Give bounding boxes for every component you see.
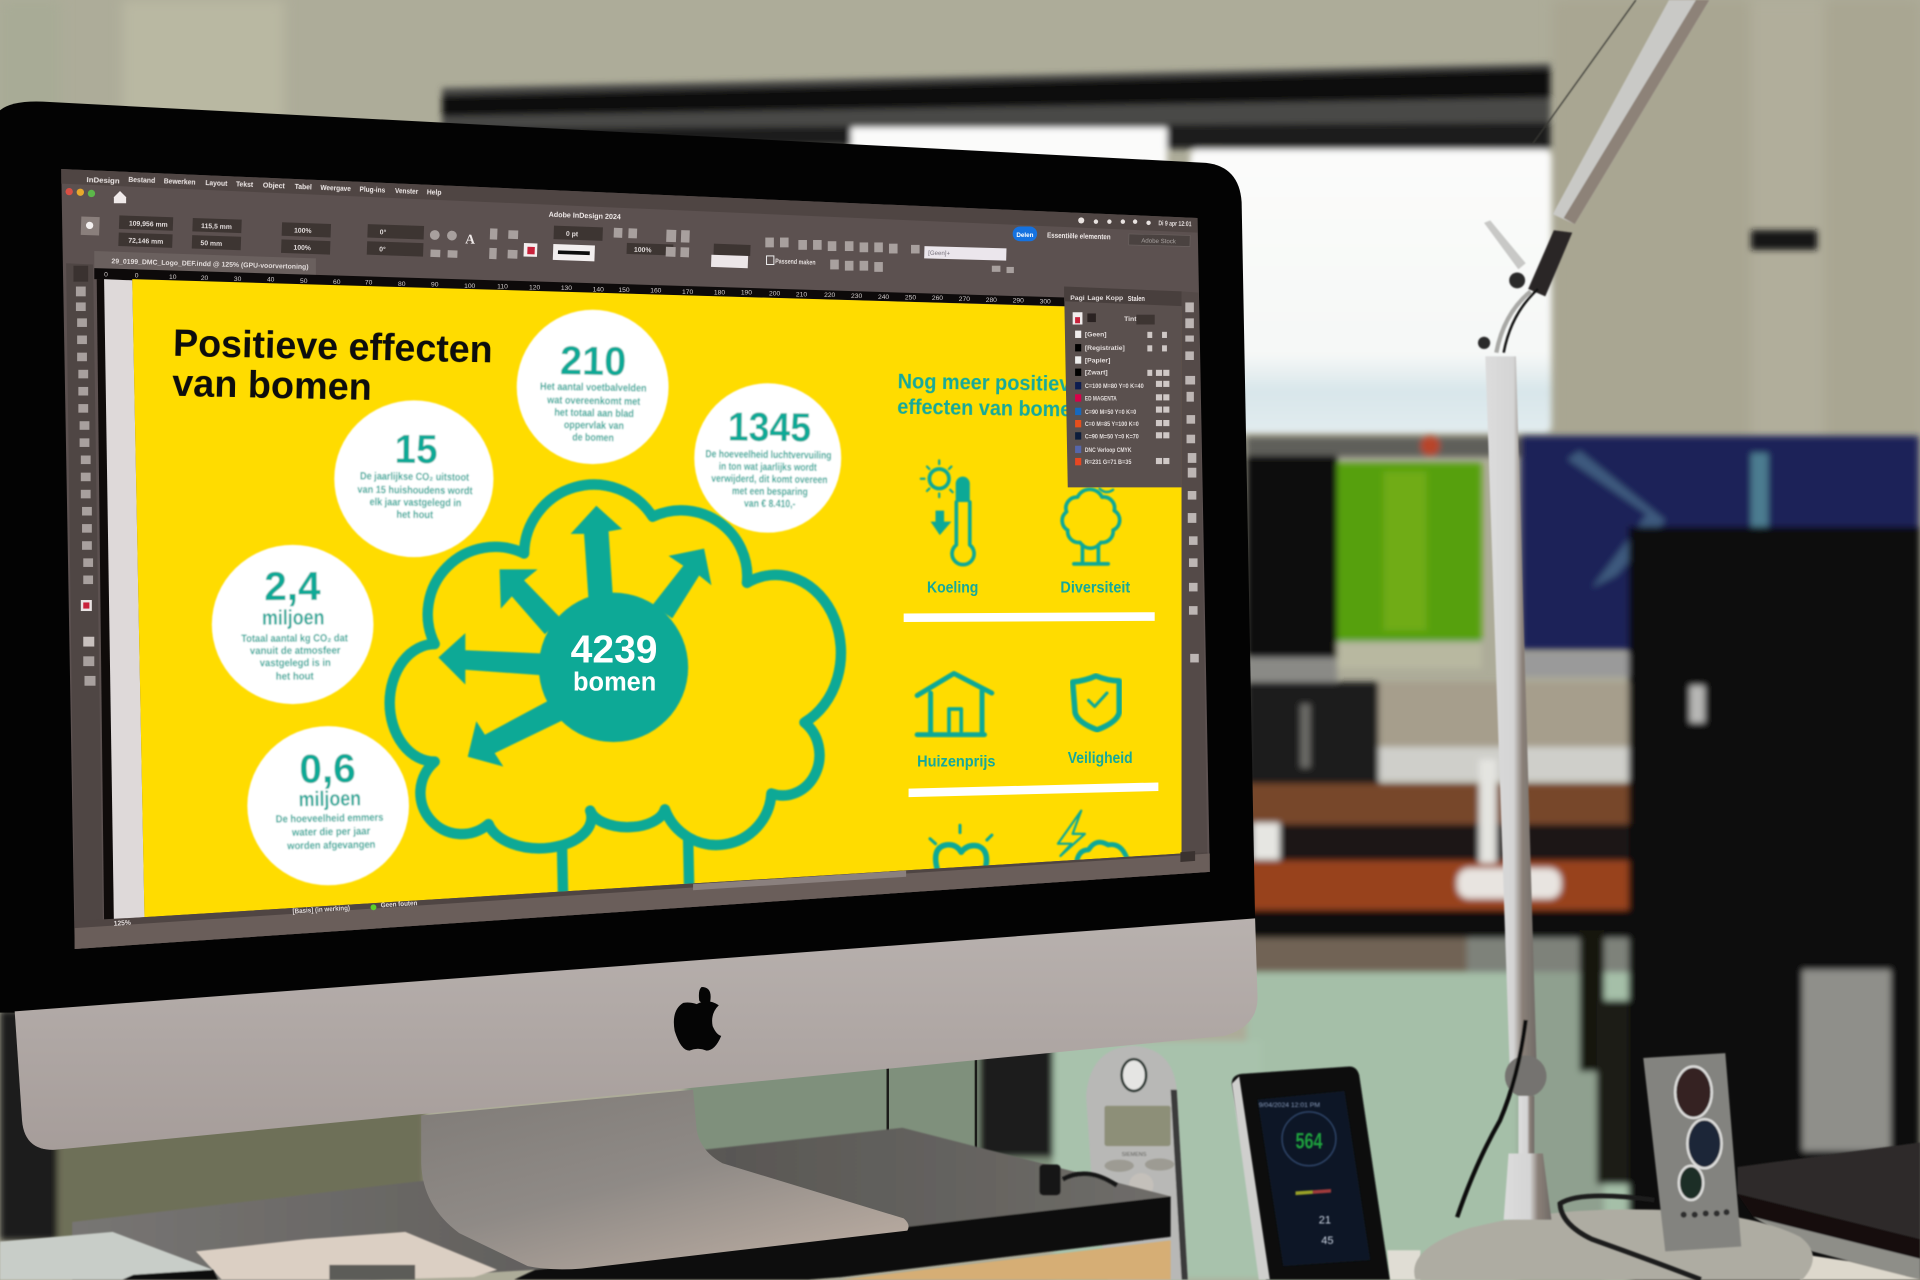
stat: 210 football fields: 210 <box>560 337 627 384</box>
control panel: 0 pt <box>566 231 579 238</box>
stat: 2,4 miljoen kg CO2: Totaal aantal kg CO₂ dat <box>241 632 348 645</box>
horizontal ruler: 100 <box>464 283 476 290</box>
yellow document page <box>132 279 1182 917</box>
menu bar: Di 9 apr 12:01 <box>1158 220 1192 228</box>
horizontal ruler: 180 <box>714 289 725 296</box>
panel tabs <box>1070 294 1145 303</box>
horizontal ruler: 70 <box>365 280 373 287</box>
swatch list: DNC Verloop CMYK <box>1085 447 1131 454</box>
horizontal ruler: 200 <box>769 291 780 298</box>
4239 bomen label <box>571 635 656 691</box>
menu bar: Plug-ins <box>359 184 385 194</box>
menu bar: Tabel <box>295 182 312 191</box>
label: Diversiteit: Diversiteit <box>1060 580 1130 597</box>
tree trunk <box>556 839 696 892</box>
control panel: A <box>465 231 476 247</box>
iMac bezel <box>0 101 1255 1013</box>
horizontal ruler: 50 <box>300 278 308 285</box>
label: Koeling: Koeling <box>927 580 978 597</box>
menu bar <box>61 169 1198 233</box>
stat: 1345 ton air pollution: met een besparing <box>732 485 808 498</box>
horizontal ruler <box>94 268 1065 306</box>
horizontal ruler: 160 <box>650 288 662 295</box>
air quality monitor <box>1232 1067 1390 1280</box>
stat: 2,4 miljoen kg CO2: vanuit de atmosfeer <box>250 645 341 657</box>
swatch list: C=0 M=85 Y=100 K=0 <box>1085 421 1139 428</box>
Adobe Stock search <box>1129 234 1190 246</box>
control panel: 115,5 mm <box>201 223 232 231</box>
arrows radiating from the centre <box>438 506 711 767</box>
stat: 15 households: 15 <box>394 426 438 472</box>
icon: lightning and cloud <box>1058 811 1127 864</box>
dark book stack on the right <box>1387 1142 1920 1280</box>
horizontal ruler: 230 <box>851 293 862 300</box>
panel tabs: Kopp <box>1106 295 1123 302</box>
menu bar: Bestand <box>128 175 155 185</box>
stat: 0,6 miljoen buckets of water: 0,6 <box>299 745 356 792</box>
tools panel <box>66 263 103 923</box>
Adobe Stock search: Adobe Stock <box>1141 237 1177 245</box>
horizontal ruler: 270 <box>959 296 970 303</box>
status bar <box>75 851 1210 949</box>
horizontal ruler: 190 <box>741 289 752 296</box>
air quality monitor: 21 <box>1319 1214 1331 1226</box>
horizontal ruler: 210 <box>796 291 807 298</box>
heading: Positieve effecten <box>173 322 493 371</box>
right dock <box>1182 291 1207 867</box>
horizontal ruler: 260 <box>932 295 943 302</box>
panel tabs: Stalen <box>1128 294 1145 303</box>
swatches panel <box>1064 287 1182 487</box>
workspace switcher: Essentiële elementen <box>1047 231 1111 241</box>
control panel: 100% <box>634 247 652 254</box>
air quality monitor: 45 <box>1321 1235 1333 1247</box>
stat: 2,4 miljoen kg CO2: vastgelegd is in <box>260 657 331 669</box>
centre circle <box>539 593 688 742</box>
heading <box>172 329 490 400</box>
label: Huizenprijs: Huizenprijs <box>917 754 996 771</box>
horizontal ruler: 0 <box>104 272 108 279</box>
horizontal ruler: 150 <box>618 287 630 294</box>
stat: 210 football fields: het totaal aan blad <box>554 407 634 420</box>
control panel: 100% <box>294 228 312 235</box>
CO2 reading: 564 <box>1296 1129 1323 1154</box>
tree outline <box>390 485 841 848</box>
label: Veiligheid: Veiligheid <box>1068 750 1133 767</box>
swatch list: C=90 M=50 Y=0 K=0 <box>1085 409 1136 416</box>
swatch list: [Registratie] <box>1085 345 1125 352</box>
stat: 2,4 miljoen kg CO2: 2,4 <box>264 563 321 609</box>
horizontal ruler: 240 <box>878 294 889 301</box>
horizontal ruler: 40 <box>267 277 275 284</box>
swatch list: [Zwart] <box>1085 370 1108 377</box>
stat: 1345 ton air pollution <box>694 383 841 533</box>
icon: shield with check <box>1073 676 1119 730</box>
document tab: 29_0199_DMC_Logo_DEF.indd @ 125% (GPU-voorvertoning) <box>111 258 309 271</box>
menu bar: InDesign <box>86 175 120 186</box>
stat: 0,6 miljoen buckets of water: miljoen <box>298 787 361 811</box>
status bar: [Basis] (in werking) <box>292 905 350 915</box>
control panel: 0° <box>379 245 386 254</box>
stat: 1345 ton air pollution: van € 8.410,- <box>744 498 796 510</box>
share button <box>1013 227 1037 241</box>
share button: Delen <box>1016 232 1033 239</box>
icon: tree <box>1062 489 1120 564</box>
horizontal ruler: 120 <box>529 285 540 292</box>
subheading: effecten van bomen <box>897 396 1084 422</box>
panel tabs: Lage <box>1087 295 1104 302</box>
swatch list <box>1075 331 1169 466</box>
stat: 2,4 miljoen kg CO2: miljoen <box>262 606 325 630</box>
subheading: Nog meer positieve <box>898 370 1082 396</box>
stat: 1345 ton air pollution: verwijderd, dit komt overeen <box>711 473 828 486</box>
stat: 15 households <box>334 400 493 557</box>
swatch list: C=90 M=50 Y=0 K=70 <box>1085 433 1139 440</box>
control panel: 72,146 mm <box>128 238 163 246</box>
large tree diagram <box>390 485 841 906</box>
fill and stroke selector: Tint: <box>1124 316 1139 323</box>
menu bar: Weergave <box>320 183 351 193</box>
stat: 2,4 miljoen kg CO2: het hout <box>276 670 314 683</box>
menu bar: Venster <box>395 186 419 196</box>
horizontal ruler: 130 <box>561 285 572 292</box>
menu bar: Layout <box>205 178 228 188</box>
subheading <box>898 374 1066 416</box>
horizontal ruler: 220 <box>824 292 836 299</box>
control panel: 0° <box>380 228 387 237</box>
stat: 0,6 miljoen buckets of water: worden afgevangen <box>286 839 375 852</box>
control panel: [Geen]+ <box>928 250 951 257</box>
horizontal ruler: 80 <box>398 281 406 288</box>
iMac chin <box>15 918 1258 1150</box>
stat: 0,6 miljoen buckets of water: water die per jaar <box>291 825 370 839</box>
window title: Adobe InDesign 2024 <box>549 210 622 221</box>
swatch list: [Papier] <box>1085 357 1110 364</box>
horizontal ruler: 280 <box>986 297 997 304</box>
lamp base disc <box>1414 1209 1813 1280</box>
menu bar: Bewerken <box>164 176 196 186</box>
monitor stand <box>421 1090 909 1269</box>
status bar: Geen fouten <box>381 900 418 909</box>
stat: 210 football fields: de bomen <box>572 431 614 444</box>
stat: 1345 ton air pollution: De hoeveelheid luchtvervuiling <box>705 448 832 462</box>
desk lamp <box>1414 0 1813 1280</box>
control panel: Passend maken <box>775 258 816 267</box>
decorative metal stand with three circles <box>1643 1053 1741 1251</box>
horizontal ruler: 10 <box>169 274 177 281</box>
fill and stroke selector <box>1073 312 1155 324</box>
document tab <box>94 251 316 277</box>
menu bar: Tekst <box>236 179 254 189</box>
swatch list: [Geen] <box>1085 332 1107 339</box>
stat: 1345 ton air pollution: 1345 <box>728 403 811 450</box>
control panel <box>80 209 1014 273</box>
stat: 1345 ton air pollution: in ton wat jaarlijks wordt <box>719 461 817 474</box>
status bar: 125% <box>114 920 131 928</box>
stat: 15 households: het hout <box>396 509 434 521</box>
stat: 15 households: De jaarlijkse CO₂ uitstoot <box>360 470 470 484</box>
cables behind the monitor <box>888 1056 976 1161</box>
icon: thermometer and sun <box>921 460 974 565</box>
InDesign application window <box>61 169 1210 949</box>
USB cable and connector <box>1040 1164 1117 1195</box>
artwork on the page <box>172 310 1158 906</box>
heading: van bomen <box>172 363 372 409</box>
horizontal ruler: 110 <box>497 283 508 290</box>
horizontal ruler: 30 <box>234 276 242 283</box>
white divider <box>909 782 1158 797</box>
horizontal ruler: 0 <box>135 272 139 279</box>
cordless phone <box>1086 1046 1188 1280</box>
swatch list: ED MAGENTA <box>1085 395 1117 402</box>
4239 bomen label: bomen <box>573 669 656 697</box>
air quality monitor: 9/04/2024 12:01 PM <box>1259 1102 1320 1109</box>
stat: 210 football fields: wat overeenkomt met <box>546 394 641 408</box>
stat: 2,4 miljoen kg CO2 <box>212 545 373 704</box>
horizontal ruler: 60 <box>333 279 341 286</box>
horizontal ruler: 170 <box>682 289 694 296</box>
stat: 210 football fields: oppervlak van <box>564 419 624 432</box>
horizontal ruler: 140 <box>593 286 604 293</box>
paper with QR code <box>196 1232 497 1280</box>
vertical ruler <box>97 279 114 921</box>
stat: 210 football fields <box>517 310 669 464</box>
horizontal ruler: 90 <box>431 282 439 289</box>
pasteboard <box>104 279 144 920</box>
horizontal ruler: 300 <box>1040 299 1051 306</box>
menu bar: Object <box>263 180 286 190</box>
stat: 0,6 miljoen buckets of water <box>247 726 409 885</box>
horizontal ruler: 20 <box>201 275 209 282</box>
white divider <box>904 612 1155 622</box>
horizontal ruler: 290 <box>1013 297 1024 304</box>
horizontal ruler: 250 <box>905 294 916 301</box>
control panel: 100% <box>293 245 311 252</box>
panel tabs: Pagi <box>1070 295 1085 302</box>
white table top <box>1387 1250 1420 1280</box>
icon: house <box>917 673 992 735</box>
icon: happy heart with rays <box>930 825 992 872</box>
swatch list: C=100 M=80 Y=0 K=40 <box>1085 383 1144 390</box>
icon: home <box>114 191 126 203</box>
control panel: 109,956 mm <box>129 221 168 229</box>
icon: apple logo <box>674 987 721 1051</box>
cordless phone: SIEMENS <box>1122 1152 1147 1158</box>
4239 bomen label: 4239 <box>571 628 658 671</box>
stat: 0,6 miljoen buckets of water: De hoeveelheid emmers <box>276 812 384 826</box>
desk shelf under the monitor <box>72 1128 1171 1280</box>
menu bar: Help <box>427 187 442 197</box>
stat: 15 households: van 15 huishoudens wordt <box>357 484 473 497</box>
control panel: 50 mm <box>200 240 222 248</box>
window controls <box>66 188 95 197</box>
swatch list: R=231 G=71 B=35 <box>1085 459 1132 466</box>
white box bottom left <box>0 1232 218 1280</box>
stat: 15 households: elk jaar vastgelegd in <box>369 496 461 509</box>
stat: 210 football fields: Het aantal voetbalvelden <box>540 381 647 395</box>
